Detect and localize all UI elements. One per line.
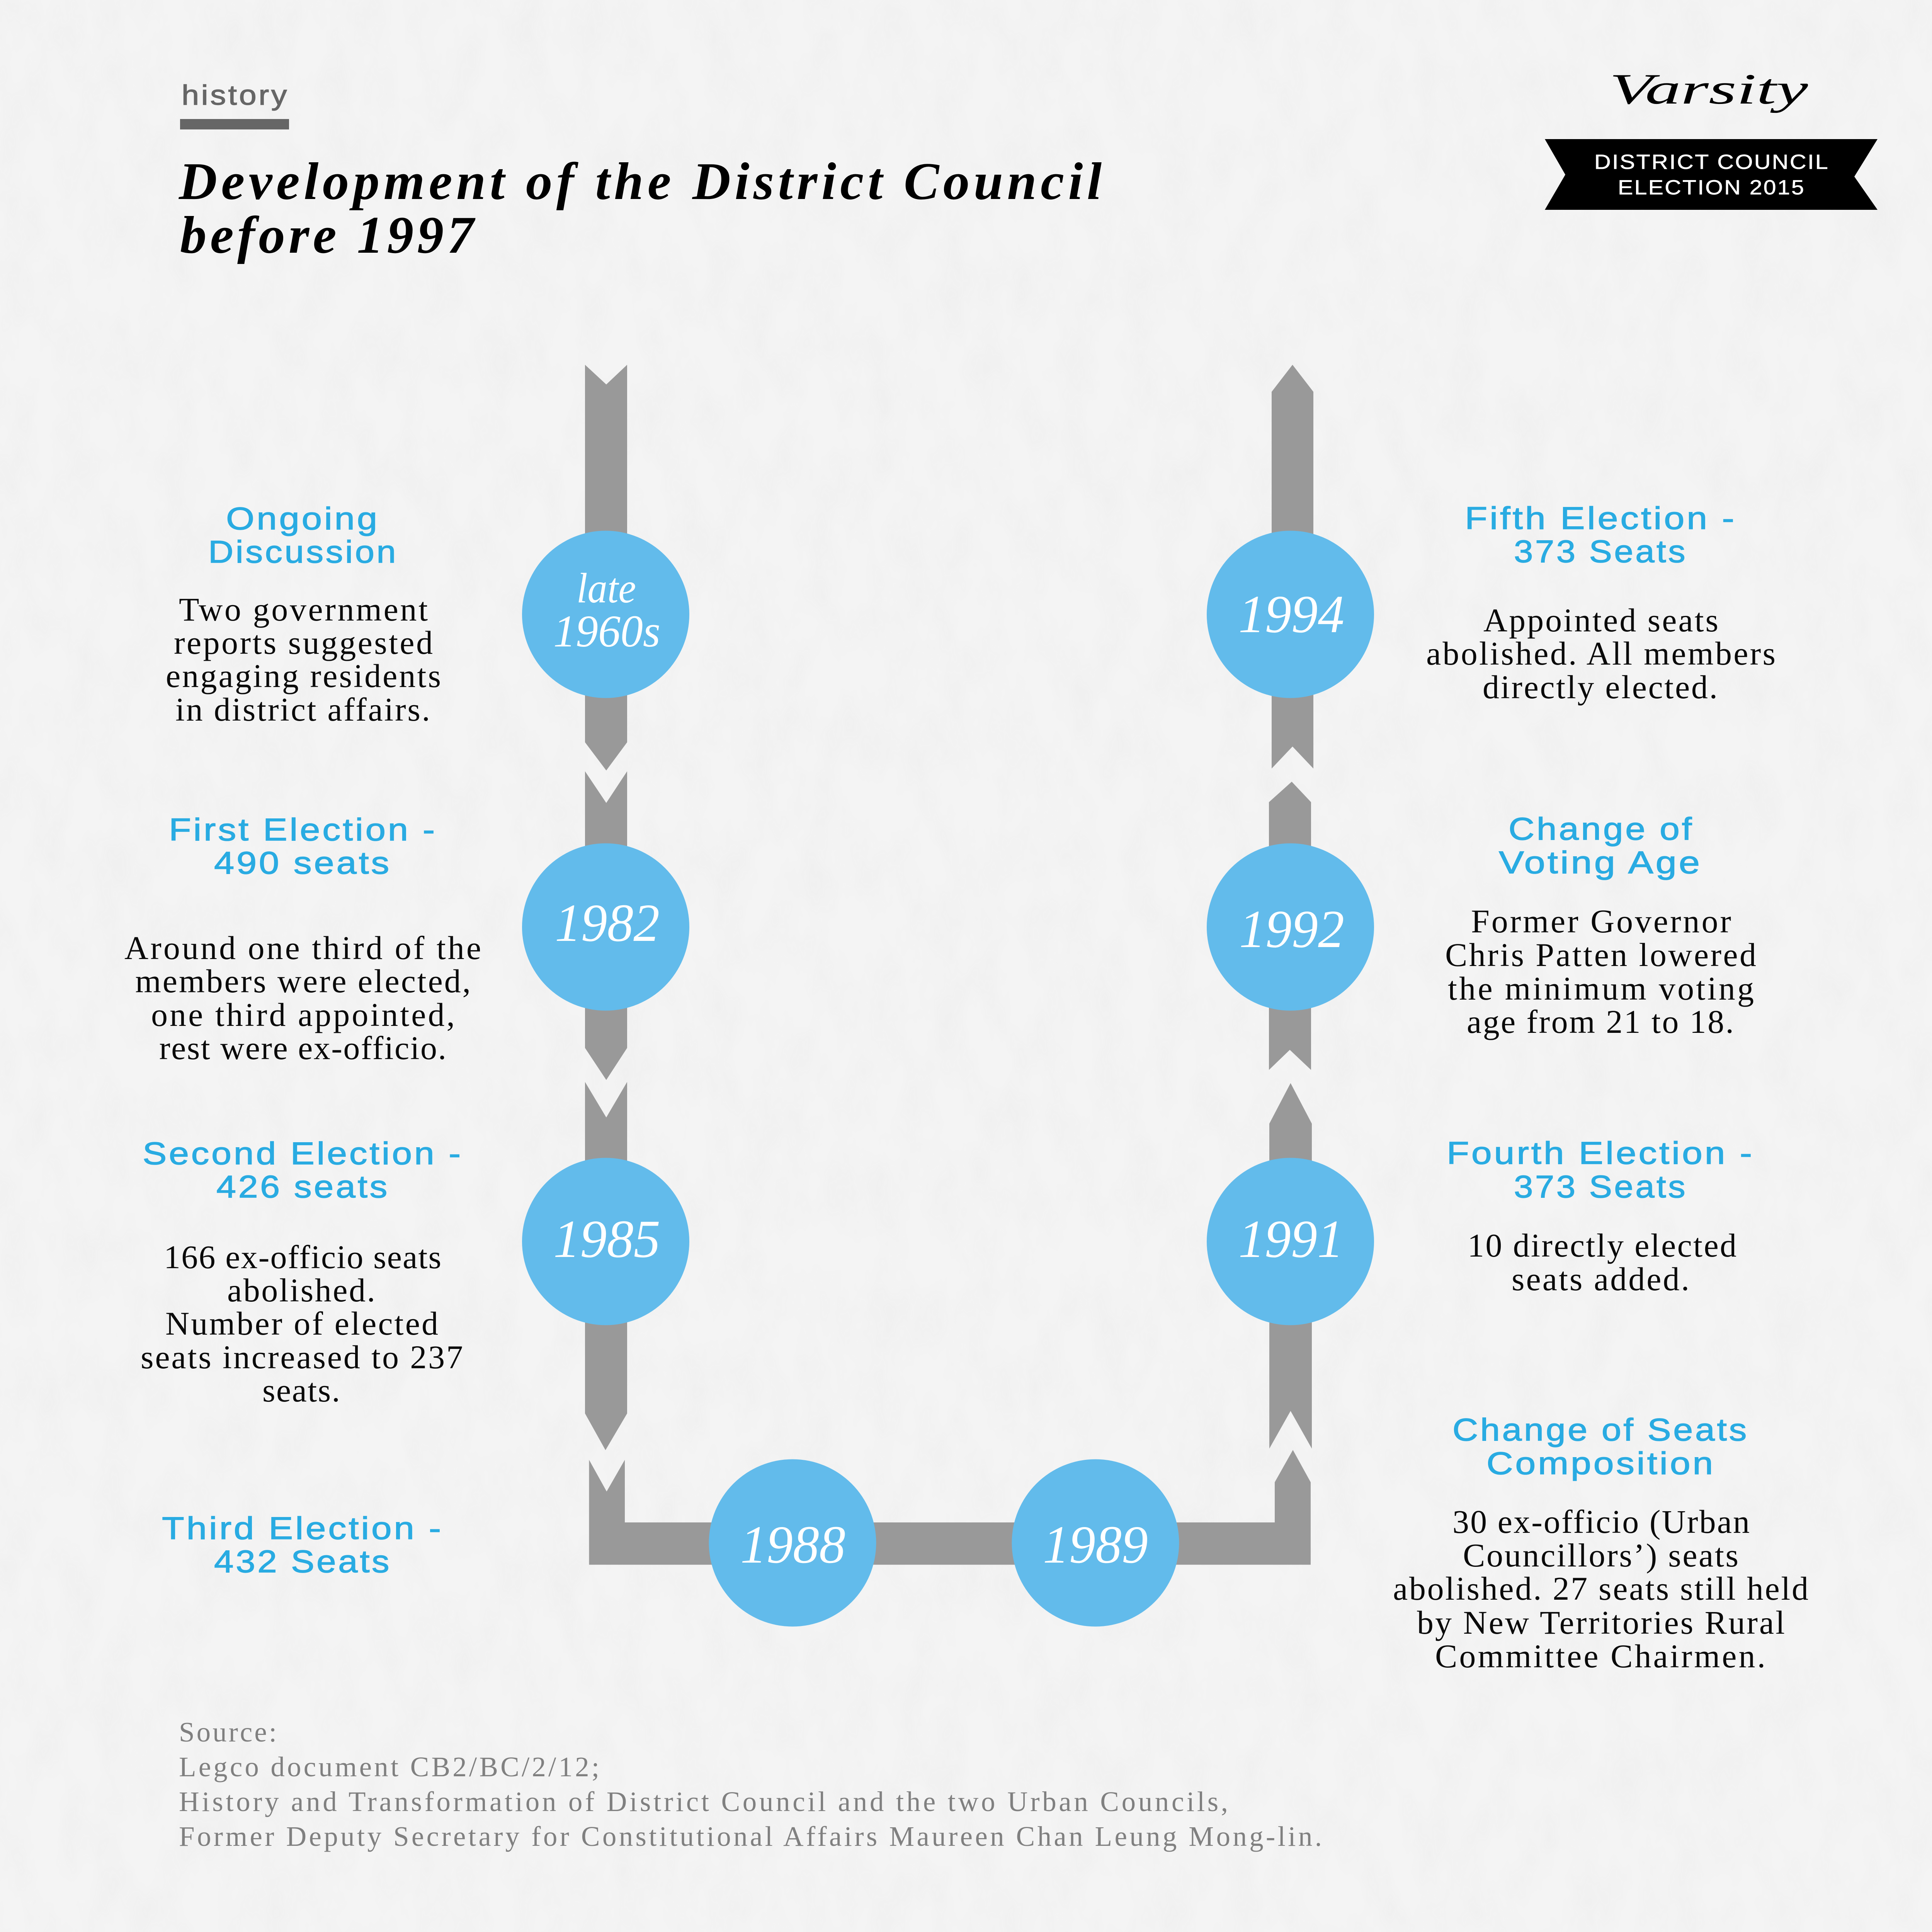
text block: engaging residents [166, 657, 441, 694]
text block: age from 21 to 18. [1467, 1003, 1734, 1040]
heading: Ongoing [226, 501, 379, 536]
text block: Chris Patten lowered [1445, 936, 1756, 973]
text block: 10 directly elected [1468, 1227, 1736, 1264]
text block [166, 591, 441, 728]
text block: Appointed seats [1483, 602, 1718, 639]
heading: Fifth Election - [1465, 501, 1736, 536]
node: late 1960s: 1960s [553, 606, 660, 656]
heading: Fourth Election - [1447, 1136, 1754, 1171]
panel: Fifth Election [1426, 501, 1776, 706]
heading [143, 1136, 463, 1204]
arrow segment: right 2 [1269, 782, 1311, 1070]
node: 1985: 1985 [553, 1209, 660, 1269]
heading: Change of Seats [1452, 1412, 1749, 1447]
banner: District Council Election 2015: ELECTION 2015 [1618, 176, 1805, 199]
text block: seats added. [1512, 1260, 1689, 1298]
text block [1426, 602, 1776, 706]
heading [1452, 1412, 1749, 1481]
text block: seats. [262, 1372, 340, 1409]
panel: First Election [124, 812, 481, 1066]
text block: 30 ex-officio (Urban [1452, 1503, 1750, 1540]
title: Development of the District Council [179, 152, 1102, 211]
text block: the minimum voting [1448, 970, 1754, 1007]
logo: Varsity: Varsity [1609, 65, 1808, 113]
text block: directly elected. [1483, 668, 1718, 706]
arrow segment: left 2 [585, 771, 627, 1080]
node: 1989 [1012, 1459, 1179, 1627]
heading: 426 seats [216, 1169, 389, 1204]
text block [124, 929, 481, 1066]
text block: seats increased to 237 [141, 1338, 463, 1376]
text block: Around one third of the [124, 929, 481, 966]
text block: 166 ex-officio seats [164, 1238, 441, 1276]
panel: Third Election: 432 Seats [214, 1544, 391, 1579]
heading: Composition [1486, 1446, 1715, 1481]
text block: one third appointed, [151, 996, 455, 1033]
arrow segment: bottom connector [589, 1450, 1311, 1565]
node: 1992: 1992 [1239, 900, 1344, 959]
node: 1994: 1994 [1238, 585, 1344, 644]
banner: District Council Election 2015: DISTRICT COUNCIL [1594, 151, 1829, 173]
text block: abolished. [227, 1272, 375, 1309]
title: before 1997 [180, 206, 476, 264]
source note: Legco document CB2/BC/2/12; [179, 1751, 599, 1782]
heading: 373 Seats [1514, 534, 1687, 569]
text block: Committee Chairmen. [1435, 1638, 1765, 1675]
heading: Voting Age [1499, 845, 1702, 880]
text block: by New Territories Rural [1417, 1604, 1785, 1641]
arrow segment: left 1 [585, 365, 627, 770]
node: 1994 [1207, 531, 1374, 698]
panel: Ongoing Discussion [166, 501, 441, 728]
arrow segment: left 3 [585, 1082, 627, 1450]
node: 1988: 1988 [740, 1515, 845, 1575]
text block: Number of elected [165, 1305, 438, 1342]
node: late 1960s [522, 531, 689, 698]
text block: members were elected, [135, 963, 471, 1000]
panel: Third Election [162, 1511, 443, 1579]
heading: Discussion [208, 534, 398, 570]
heading [169, 812, 437, 881]
source note: Former Deputy Secretary for Constitutional Affairs Maureen Chan Leung Mong-lin. [179, 1821, 1322, 1852]
source note: Source: [179, 1716, 277, 1748]
text block: Two government [179, 591, 428, 628]
heading: 490 seats [214, 845, 391, 881]
node: 1982: 1982 [555, 893, 660, 953]
heading [208, 501, 398, 570]
text block: Councillors’) seats [1463, 1537, 1738, 1574]
panel: Change of Seats Composition [1393, 1412, 1808, 1675]
section label: history [180, 80, 289, 129]
text block: abolished. All members [1426, 635, 1776, 672]
section label: history: history [182, 80, 289, 111]
text block: rest were ex-officio. [159, 1029, 446, 1066]
node: 1985 [522, 1158, 689, 1325]
heading: 373 Seats [1514, 1169, 1687, 1204]
text block: reports suggested [174, 624, 433, 661]
arrow segment: right 1 [1272, 365, 1313, 769]
text block: in district affairs. [175, 691, 430, 728]
panel: Fourth Election [1447, 1136, 1754, 1298]
heading: First Election - [169, 812, 437, 847]
node: 1991: 1991 [1238, 1209, 1344, 1269]
timeline arrow path [585, 365, 1313, 1565]
node: 1982 [522, 843, 689, 1011]
source note [179, 1716, 1322, 1852]
text block: Former Governor [1471, 903, 1731, 940]
text block [141, 1238, 463, 1409]
text block [1445, 903, 1756, 1040]
source note: History and Transformation of District Council and the two Urban Councils, [179, 1786, 1228, 1817]
node: 1991 [1207, 1158, 1374, 1325]
text block [1468, 1227, 1736, 1298]
heading [1447, 1136, 1754, 1204]
heading [1499, 811, 1702, 880]
text block: abolished. 27 seats still held [1393, 1570, 1808, 1607]
heading: Change of [1509, 811, 1694, 847]
text block [1393, 1503, 1808, 1675]
panel: Change of Voting Age [1445, 811, 1756, 1040]
heading: Second Election - [143, 1136, 463, 1171]
node: late 1960s: late [577, 565, 636, 612]
banner: District Council Election 2015 [1545, 139, 1878, 210]
node: 1988 [709, 1459, 876, 1627]
heading [1465, 501, 1736, 569]
panel: Second Election [141, 1136, 463, 1409]
node: 1992 [1207, 843, 1374, 1011]
panel: Third Election: Third Election - [162, 1511, 443, 1546]
node: 1989: 1989 [1043, 1515, 1148, 1575]
arrow segment: right 3 [1269, 1083, 1312, 1449]
title [179, 152, 1102, 264]
